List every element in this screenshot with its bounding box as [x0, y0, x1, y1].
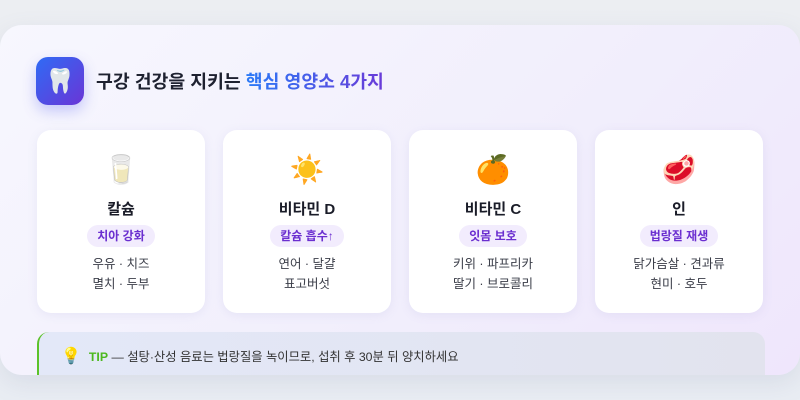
panel: calcium: 치아 강화 [97, 229, 145, 243]
panel: vitamin C: 딸기 · 브로콜리 [453, 277, 533, 291]
panel: phosphorus: 인 [672, 201, 686, 218]
panel: calcium: 우유 · 치즈 [92, 257, 150, 271]
panel: phosphorus: 법랑질 재생 [650, 229, 708, 243]
panel: vitamin D: 표고버섯 [284, 277, 330, 291]
panel: phosphorus: 닭가슴살 · 견과류 [633, 257, 725, 271]
panel: vitamin C [409, 130, 577, 313]
panel: vitamin D: ☀️ [290, 154, 324, 185]
icon: tooth: 🦷 [45, 68, 75, 94]
panel: vitamin C: 잇몸 보호 [469, 229, 517, 243]
panel: phosphorus: 🥩 [662, 154, 696, 185]
panel: vitamin C: 🍊 [476, 154, 510, 185]
panel: phosphorus [595, 130, 763, 313]
panel: vitamin D: 칼슘 흡수↑ [280, 229, 334, 243]
panel: phosphorus: 현미 · 호두 [650, 277, 708, 291]
panel: vitamin C: 비타민 C [465, 201, 521, 218]
panel: calcium [37, 130, 205, 313]
panel: vitamin C: 키위 · 파프리카 [453, 257, 533, 271]
panel: calcium: 멸치 · 두부 [92, 277, 150, 291]
panel: vitamin D: 비타민 D [279, 201, 335, 218]
icon: tooth [36, 57, 84, 105]
panel: vitamin D: 연어 · 달걀 [278, 257, 336, 271]
panel: calcium: 칼슘 [107, 201, 135, 218]
panel: calcium: 🥛 [104, 154, 138, 185]
callout: tip [37, 332, 765, 392]
panel: vitamin D [223, 130, 391, 313]
callout: tip: 💡 TIP — 설탕·산성 음료는 법랑질을 녹이므로, 섭취 후 30분 뒤 양치하세요 [61, 348, 459, 365]
title: 구강 건강을 지키는 핵심 영양소 4가지 [96, 71, 384, 92]
